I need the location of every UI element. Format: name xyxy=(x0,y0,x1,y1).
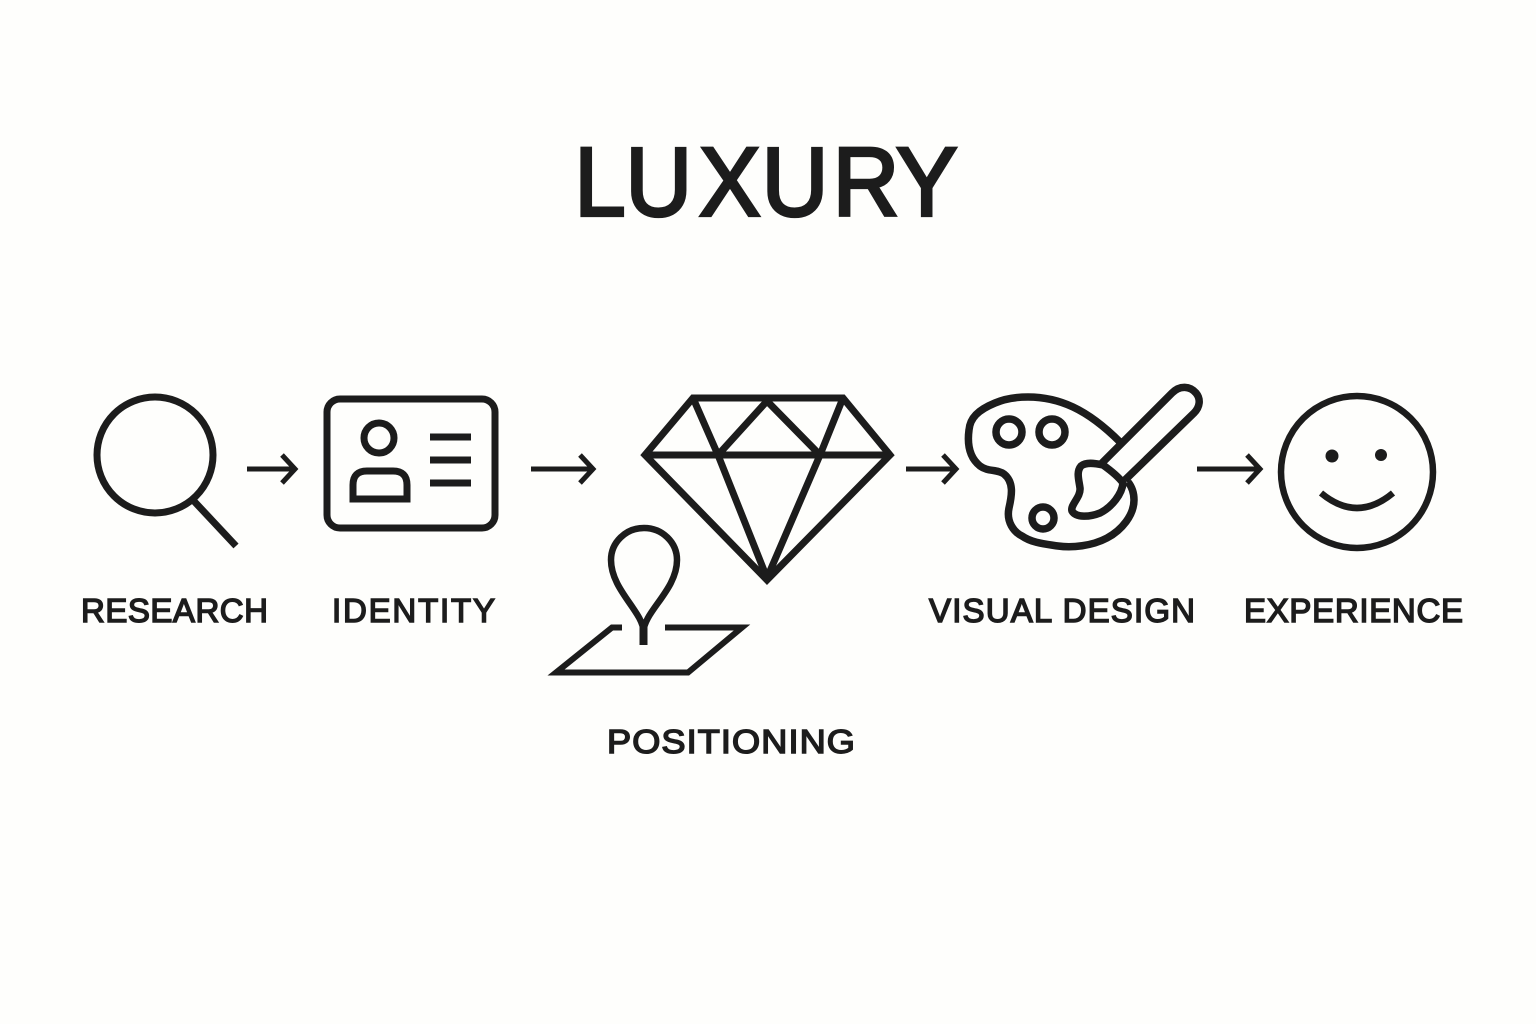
arrow: research to identity xyxy=(247,455,295,483)
icon: identity card xyxy=(327,399,495,528)
label: identity: IDENTITY xyxy=(332,592,495,629)
arrow: visual design to experience xyxy=(1197,455,1260,483)
label: experience: EXPERIENCE xyxy=(1244,592,1463,629)
arrow: diamond to visual design xyxy=(906,455,956,483)
icon: smiley face xyxy=(1281,396,1433,548)
icon: magnifying glass xyxy=(97,397,236,546)
title: LUXURY xyxy=(574,128,957,237)
arrow: identity to diamond xyxy=(531,455,593,483)
label: positioning: POSITIONING xyxy=(607,723,856,760)
icon: location pin on map xyxy=(556,528,742,672)
label: research: RESEARCH xyxy=(81,592,268,629)
label: visual design: VISUAL DESIGN xyxy=(929,592,1195,629)
icon: painter palette and brush xyxy=(968,387,1199,547)
icon: diamond xyxy=(645,398,890,580)
